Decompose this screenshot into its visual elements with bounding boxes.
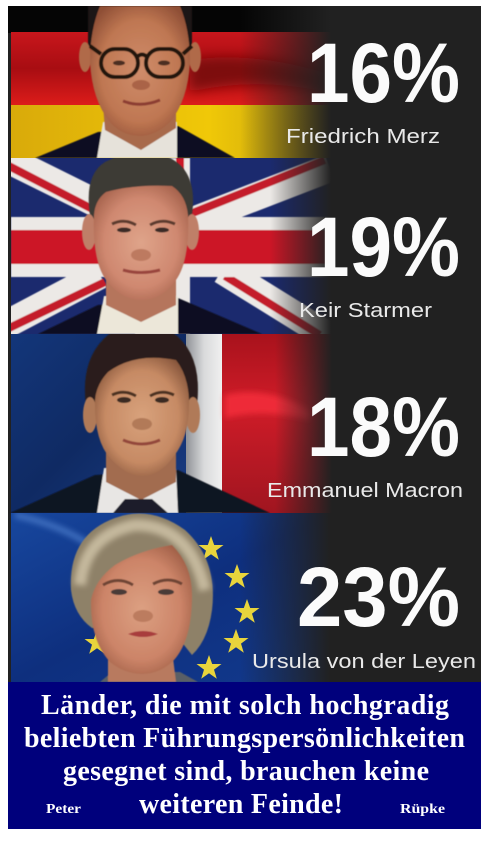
portrait: von der Leyen — [71, 514, 213, 682]
portrait: Merz — [35, 6, 235, 158]
value: 23 percent: 23% — [297, 550, 460, 644]
signature: last name: Rüpke — [400, 802, 445, 817]
panel: Emmanuel Macron — [10, 323, 463, 513]
value: 18 percent: 18% — [307, 380, 460, 474]
caption line 3: gesegnet sind, brauchen keine — [63, 756, 429, 787]
name: Friedrich Merz: Friedrich Merz — [286, 126, 440, 148]
name: Keir Starmer: Keir Starmer — [299, 300, 432, 322]
value: 16 percent: 16% — [307, 26, 460, 120]
portrait: Macron — [10, 323, 270, 513]
signature: first name: Peter — [46, 802, 81, 817]
value: 19 percent: 19% — [307, 200, 460, 294]
banner: caption — [8, 682, 481, 829]
glasses — [90, 46, 192, 77]
EU stars — [84, 536, 260, 679]
caption line 2: beliebten Führungspersönlichkeiten — [24, 723, 465, 754]
caption line 4: weiteren Feinde! — [139, 789, 343, 820]
name: Emmanuel Macron: Emmanuel Macron — [267, 480, 463, 502]
panel: Ursula von der Leyen — [11, 513, 476, 682]
caption line 1: Länder, die mit solch hochgradig — [41, 690, 449, 721]
panel: Friedrich Merz — [8, 6, 460, 158]
EU flag — [11, 513, 330, 682]
panel: Keir Starmer — [5, 153, 460, 340]
portrait: Starmer — [38, 153, 262, 334]
French flag — [11, 334, 332, 513]
name: Ursula von der Leyen: Ursula von der Leyen — [252, 651, 476, 673]
dark background panel — [8, 6, 481, 682]
German flag — [8, 6, 341, 158]
Union Jack flag — [5, 158, 335, 340]
